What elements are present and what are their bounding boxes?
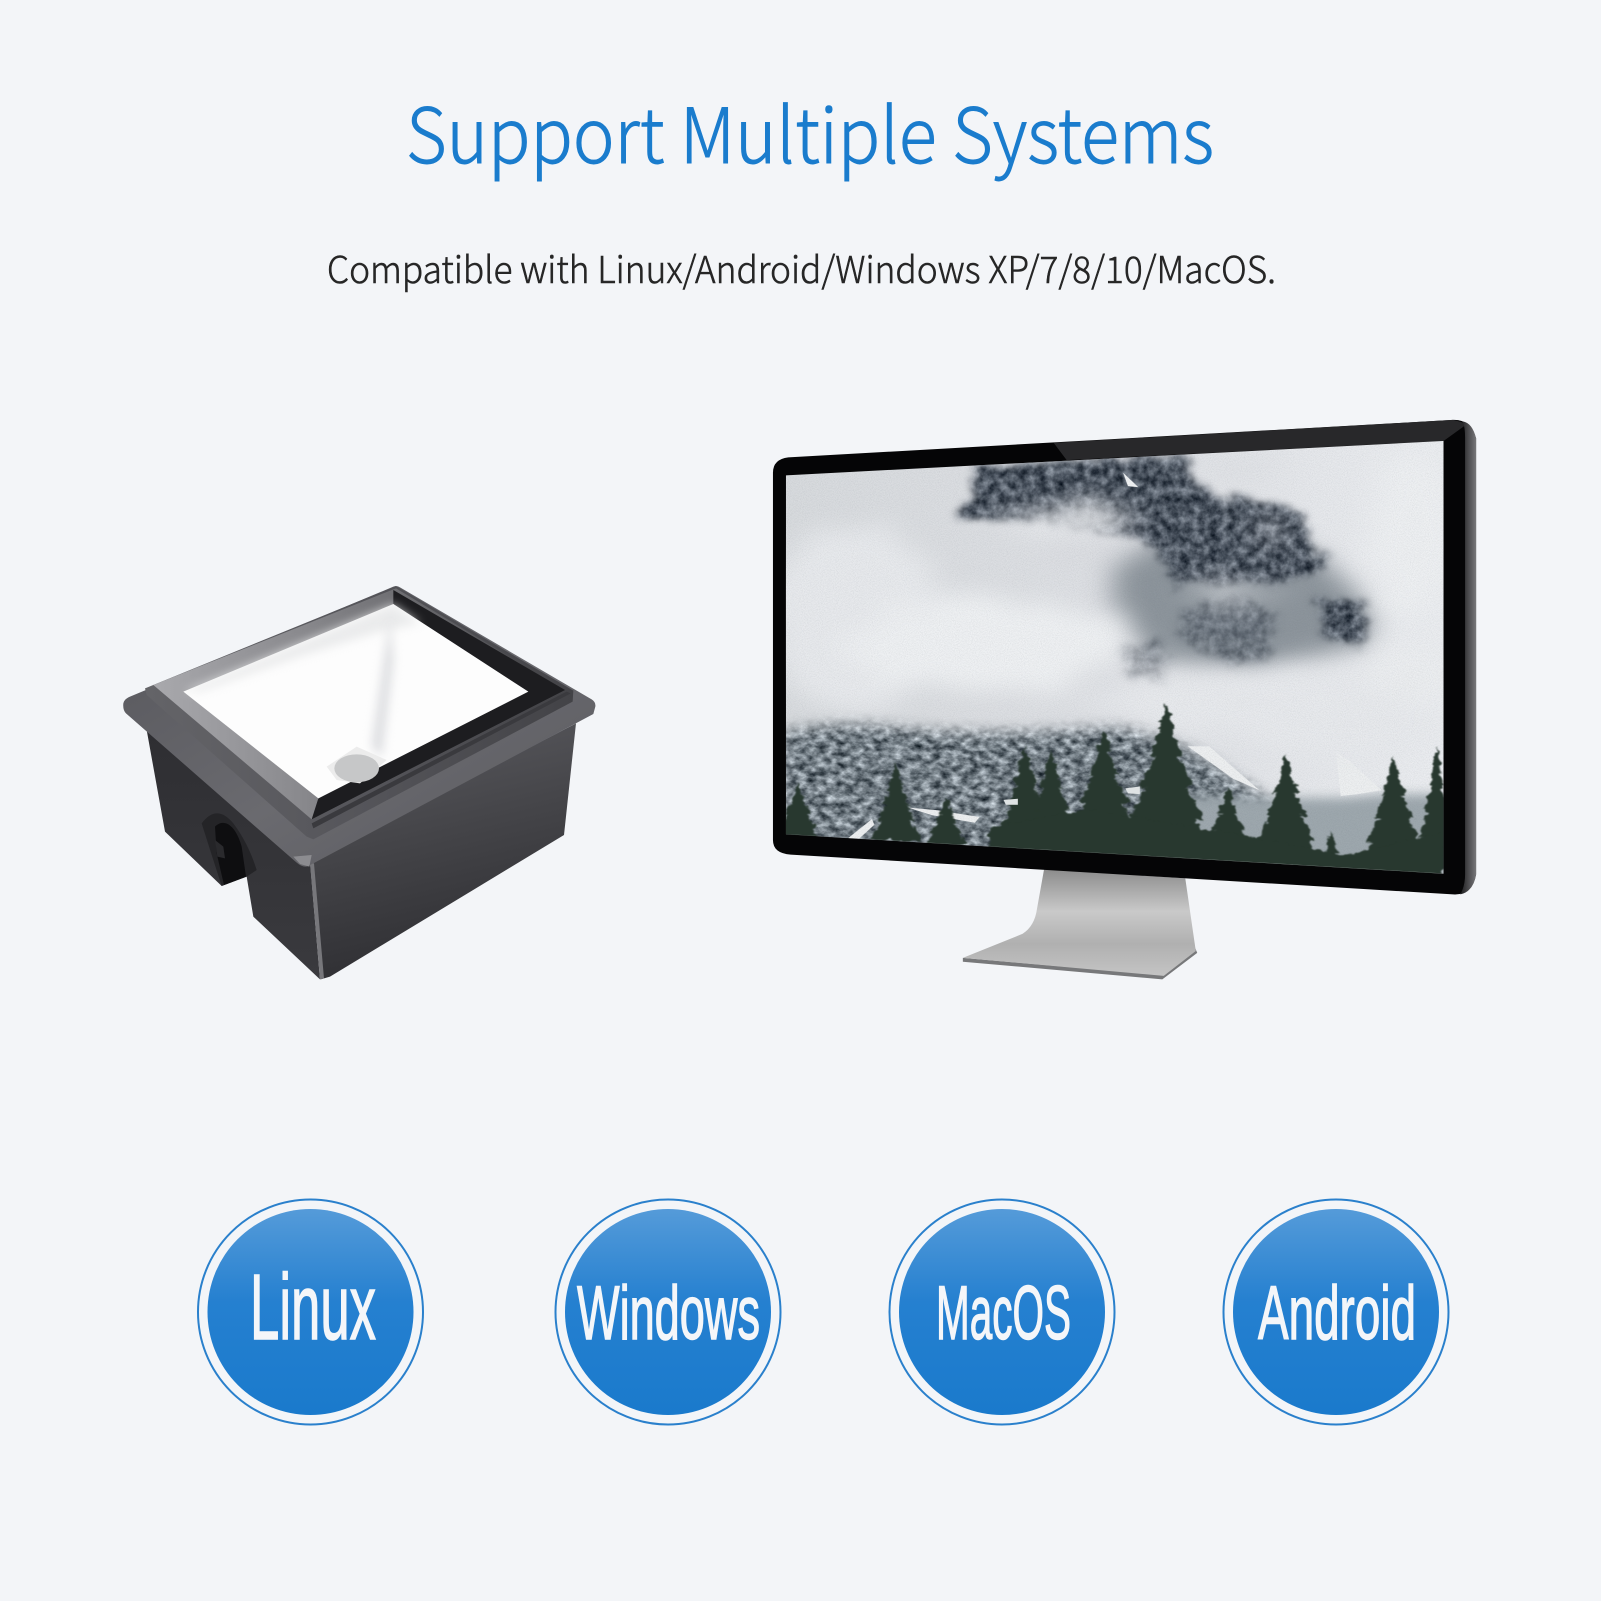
monitor screen photo xyxy=(764,434,1460,878)
badge disc xyxy=(565,1209,771,1415)
pine trees xyxy=(774,704,1460,876)
scanner glass dark edge xyxy=(312,590,565,819)
scanner left face xyxy=(147,730,320,979)
badge: MacOS xyxy=(890,1200,1114,1424)
badge ring xyxy=(1224,1200,1448,1424)
monitor xyxy=(764,420,1476,979)
badge: Windows xyxy=(556,1200,780,1424)
snow streaks xyxy=(848,746,1381,840)
monitor side edge xyxy=(1460,421,1476,894)
monitor bezel reflection xyxy=(1054,420,1467,460)
monitor stand xyxy=(963,869,1197,979)
snow patch on peak xyxy=(1123,473,1138,487)
badge ring xyxy=(556,1200,780,1424)
pale mist on right of lower slope xyxy=(1252,698,1444,752)
scanner right face xyxy=(310,723,576,979)
monitor bezel xyxy=(773,420,1476,894)
title: Support Multiple Systems xyxy=(406,75,1214,185)
scanner bezel dark lip xyxy=(312,692,571,828)
badge: Android xyxy=(1224,1200,1448,1424)
scanner flange corner highlight xyxy=(293,855,312,867)
scanner bezel xyxy=(145,586,573,839)
badge label: Linux xyxy=(250,1255,376,1359)
scanner cable port xyxy=(202,813,257,886)
badge label: Android xyxy=(1258,1271,1416,1356)
badge ring xyxy=(198,1200,423,1424)
scanner corner highlight xyxy=(310,863,324,979)
scanner window inner shading xyxy=(183,604,420,783)
icon: barcode scanner module xyxy=(123,586,595,979)
fine photo grain xyxy=(779,434,1448,878)
badge disc xyxy=(899,1209,1105,1415)
badge label: MacOS xyxy=(936,1271,1071,1356)
snow flecks among trees xyxy=(1004,786,1140,805)
badge disc xyxy=(208,1209,414,1415)
lower mountain slope xyxy=(786,714,1275,847)
pale valley slope xyxy=(1171,794,1448,878)
badge label: Windows xyxy=(577,1271,760,1356)
badge ring xyxy=(890,1200,1114,1424)
clouds over the peak xyxy=(764,450,1453,731)
soft mountain haze xyxy=(1114,515,1372,668)
subtitle: Compatible with Linux/Android/Windows XP/7/8/10/MacOS. xyxy=(327,240,1276,294)
scanner window xyxy=(183,604,528,798)
badge disc xyxy=(1233,1209,1439,1415)
badge: Linux xyxy=(198,1200,423,1424)
scanner glass frame xyxy=(153,588,565,819)
scanner flange xyxy=(123,586,595,867)
mountain peak xyxy=(951,454,1370,683)
